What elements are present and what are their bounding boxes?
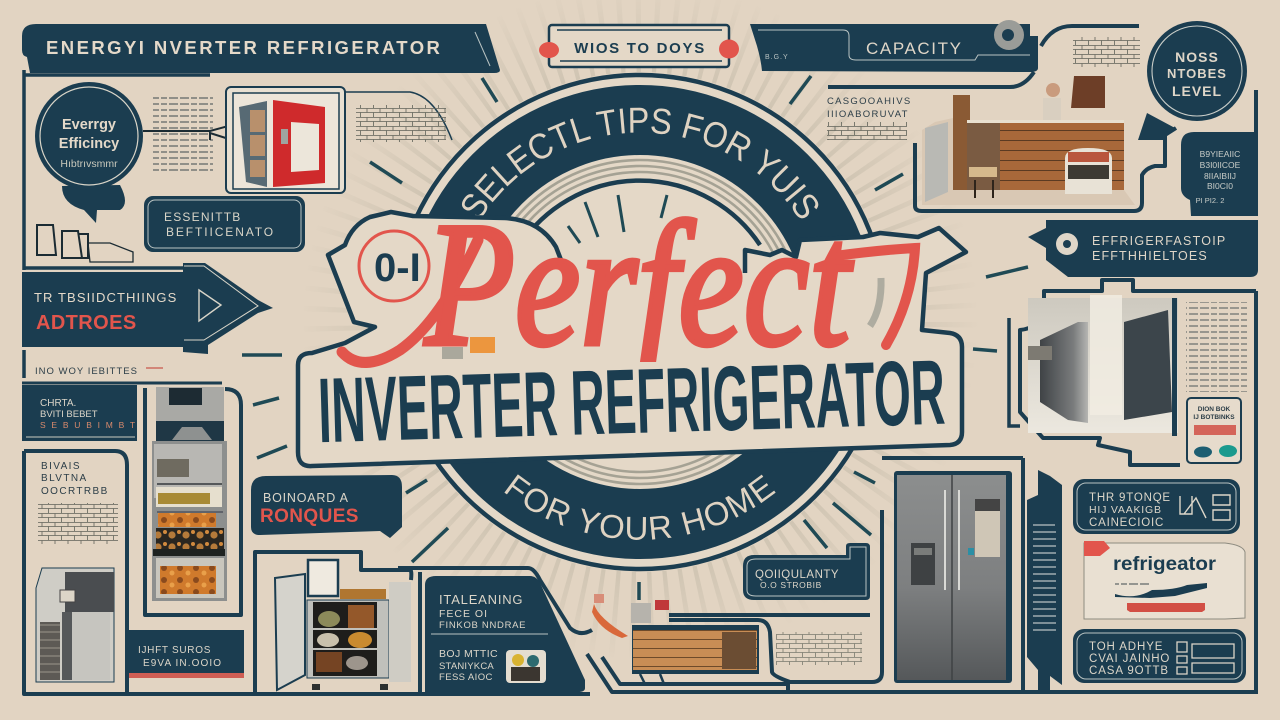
icons: jars (37, 225, 133, 262)
box: specs: B9YIEAIIC (1200, 149, 1240, 159)
radial tick marks (242, 76, 1028, 600)
small table (969, 167, 997, 198)
image: grey refrigerator (36, 568, 114, 682)
banner: capacity: CAPACITY (866, 39, 963, 58)
card: dion bok: DION BOK (1198, 406, 1231, 413)
badge: 0-I: 0-I (374, 246, 421, 290)
lower curved heading: FOR YOUR HOME (504, 474, 776, 540)
icon: emblem (994, 20, 1024, 50)
banner: capacity: B.G.Y (765, 54, 789, 61)
box: ton adhye: CVAI JAINHO (1089, 653, 1170, 665)
pills (1194, 445, 1237, 458)
text: casgoodahivs: CASGOOAHIVS (827, 96, 912, 107)
badge: energy efficiency: Efficincy (59, 136, 119, 152)
text block: lower left: BIVAIS (41, 461, 81, 472)
body (152, 441, 227, 601)
frame (882, 458, 1023, 694)
box: the storage: HIJ VAAKIGB (1089, 504, 1162, 516)
paper: refrigerator label: refrigeator (1113, 554, 1217, 575)
box: ton adhye: TOH ADHYE (1089, 641, 1163, 653)
ribbon banner (298, 212, 966, 466)
text block: lower left: BLVTNA (41, 473, 88, 484)
fine-print block: right (1186, 302, 1248, 392)
inner navy arc (520, 181, 760, 245)
panel: italeaning: BOJ MTTIC (439, 648, 498, 660)
text: casgoodahivs: IIIOABORUVAT (827, 109, 909, 120)
badge: noise level: NOSS (1175, 49, 1219, 65)
box: chart (22, 383, 222, 441)
script title: Perfect (336, 216, 920, 368)
panel outline: lower left (24, 451, 590, 694)
paper: refrigerator label (1084, 541, 1245, 619)
panel: right outer frame (1020, 280, 1256, 694)
connector arrow (143, 125, 232, 140)
box: essential: BEFTIICENATO (166, 225, 275, 239)
arrow banner: adtroes: TR TBSIIDCTHIINGS (34, 290, 177, 305)
box: refrigerator effects: EFFRIGERFASTOIP (1092, 234, 1227, 248)
panel: italeaning: ITALEANING (439, 592, 523, 607)
emblem outer ring (393, 75, 887, 569)
box: the storage: THR 9TONQE (1089, 492, 1171, 504)
panel: italeaning: FINKOB NNDRAE (439, 620, 526, 631)
panel: italeaning: FECE OI (439, 608, 488, 620)
caption line (24, 350, 163, 378)
badge: energy efficiency: Hıbtrıvsmmr (60, 158, 118, 170)
brick block: bottom (776, 632, 862, 665)
inner ticks (568, 195, 667, 243)
panel: kitchen (915, 76, 1176, 211)
bracket tick (1009, 318, 1020, 426)
box: specs: 8IIAIBIIJ (1204, 171, 1236, 181)
radial sunburst rays (345, 27, 935, 617)
box: chart: S E B U B I M B T (40, 420, 137, 430)
box: specs: BI0CI0 (1207, 181, 1233, 191)
text block: lower left: OOCRTRBB (41, 486, 109, 497)
panel: large refrigerator (882, 458, 1023, 694)
script title: Perfect: Perfect (424, 185, 854, 383)
cabinet (307, 600, 389, 678)
icons (1177, 642, 1234, 674)
stool (1065, 148, 1112, 194)
grey concentric arcs (478, 160, 802, 484)
panel: open refrigerator (255, 552, 411, 692)
dispenser (911, 543, 935, 585)
left panel frame (24, 70, 210, 270)
box: quality: QOIIQULANTY (755, 569, 839, 581)
fridge notes (968, 499, 1000, 557)
speech tail (1138, 113, 1175, 140)
box: refrigerator effects (1028, 220, 1258, 277)
fine-print block (153, 95, 213, 172)
room (922, 118, 1135, 205)
grey accent (870, 278, 881, 326)
box: insert guide: E9VA IN.OOIO (143, 658, 222, 669)
box: the storage (1073, 479, 1240, 534)
badge: 0-I (359, 231, 429, 301)
image: side view refrigerators (1028, 295, 1178, 436)
banner: capacity (750, 20, 1038, 72)
upper curved heading: SELECTL TIPS FOR YUIS (462, 108, 818, 218)
arrow banner: adtroes: ADTROES (36, 312, 137, 334)
box: specs: PI PI2. 2 (1196, 196, 1224, 205)
emblem navy band (438, 120, 842, 524)
counter (967, 120, 1124, 190)
badge: noise level: NTOBES (1167, 66, 1227, 81)
panel: italeaning: STANIYKCA (439, 661, 494, 672)
door (275, 574, 305, 690)
booklet (1027, 470, 1062, 692)
thumbnail (506, 650, 546, 683)
box: chart: BVITI BEBET (40, 409, 98, 420)
badge: noise level: LEVEL (1172, 83, 1222, 99)
connector lines: bottom (587, 510, 1256, 692)
feet (312, 684, 388, 690)
image: red refrigerator (226, 87, 345, 193)
icons (1180, 495, 1230, 520)
brick block: top right (827, 37, 1140, 140)
arrow banner: adtroes (22, 263, 273, 354)
box: quality (743, 543, 870, 600)
frame (145, 388, 241, 615)
brick text block (345, 92, 452, 142)
right door (389, 582, 411, 682)
panel: italeaning (425, 576, 585, 692)
box: bonus callout: RONQUES (260, 506, 359, 527)
connector: capacity to kitchen (828, 26, 1139, 87)
box: specs: B3I0IICOE (1200, 160, 1241, 170)
box: ton adhye: CASA 9OTTB (1089, 665, 1169, 677)
box: wios to days: WIOS TO DOYS (574, 40, 706, 57)
box: the storage: CAINECIOIC (1089, 517, 1164, 529)
box: essential (144, 196, 305, 252)
box: wios to days (539, 25, 739, 67)
box: bonus callout (251, 475, 402, 538)
right side line (1254, 90, 1258, 135)
badge: noise level (1147, 21, 1247, 121)
top items (308, 560, 386, 599)
panel: header energy inverter (22, 24, 500, 73)
frame line: mid (398, 568, 592, 692)
box: specs (1181, 132, 1258, 216)
text: casgoodahivs (827, 96, 912, 120)
box: essential: ESSENITTB (164, 210, 241, 224)
box: ton adhye (1073, 629, 1246, 683)
box: refrigerator effects: EFFTHHIELTOES (1092, 249, 1208, 263)
badge: energy efficiency (35, 82, 143, 223)
box: chart: CHRTA. (40, 398, 76, 409)
badge: energy efficiency: Everrgy (62, 117, 116, 133)
person (1043, 76, 1105, 120)
frame (255, 552, 411, 692)
panel: tall refrigerator (145, 387, 241, 615)
text block: lower left (41, 461, 109, 497)
box: insert guide (129, 630, 244, 678)
card: dion bok: IJ BOTBINKS (1193, 414, 1235, 421)
box: insert guide: IJHFT SUROS (138, 645, 211, 656)
illustration: woman and counter (592, 594, 759, 684)
central emblem (296, 72, 968, 572)
card: dion bok (1187, 398, 1241, 463)
body (894, 471, 1012, 683)
caption line: INO WOY IEBITTES (35, 366, 138, 377)
box: bonus callout: BOINOARD A (263, 491, 349, 505)
box: quality: O.O STROBIB (760, 580, 822, 590)
brick block: lower left (38, 503, 118, 544)
tall wood (953, 95, 970, 190)
panel: header energy inverter: ENERGYI NVERTER REFRIGERATOR (46, 37, 442, 58)
outline (915, 128, 1176, 211)
top unit (156, 387, 224, 442)
shelves (313, 605, 377, 672)
red blobs (539, 40, 739, 58)
panel: italeaning: FESS AIOC (439, 672, 493, 683)
small colour swatches (442, 337, 495, 359)
